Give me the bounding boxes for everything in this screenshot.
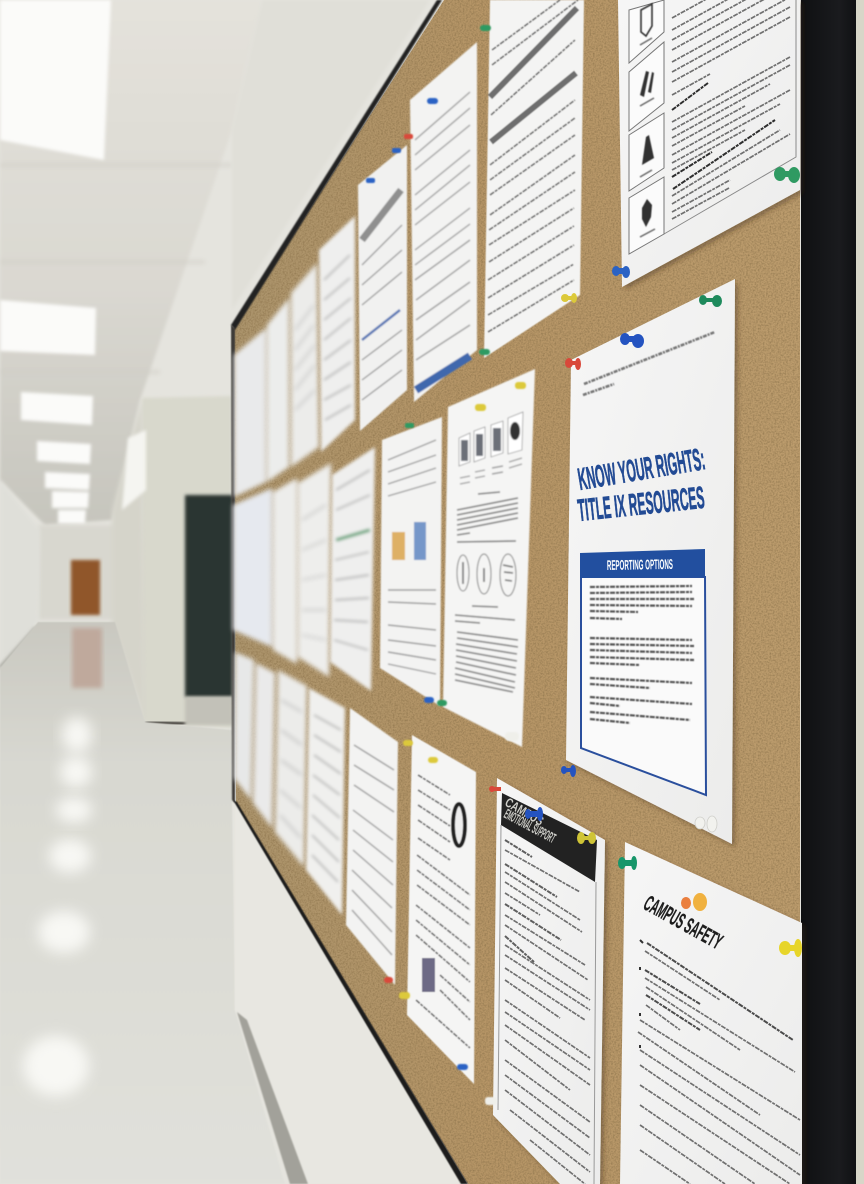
board frame: right: [801, 0, 856, 1184]
floor: [0, 622, 285, 1184]
far pins: [366, 25, 526, 1105]
far papers: top row: [234, 263, 319, 497]
inner frame: [664, 0, 796, 234]
board frame: bottom: [233, 800, 468, 1184]
paper: emotional support: [493, 778, 605, 1184]
floor reflections: [23, 717, 92, 1096]
board frame: left: [231, 325, 235, 803]
paper: middle row 3: [380, 417, 442, 706]
paper: emotional support: EMOTIONAL SUPPORT: [502, 806, 559, 846]
cork board: [230, 0, 864, 1184]
side wall with door: [142, 396, 232, 728]
paper: bottom row 4: [346, 708, 398, 985]
far papers: middle row: [233, 463, 331, 677]
reporting options body text: [590, 586, 694, 723]
mid papers group: [306, 216, 375, 915]
poster heading: [575, 441, 707, 528]
ring emblem: [453, 804, 465, 846]
lower wall beneath board: [235, 805, 465, 1184]
brown door at far end: [71, 560, 100, 615]
dark door: [185, 495, 233, 697]
sheet body text: [672, 0, 790, 219]
paper: top row 2: [484, 0, 584, 358]
paper: top row 4: [358, 145, 407, 431]
baseboard: [237, 1012, 308, 1184]
circle glyphs: [463, 562, 513, 584]
ceiling lights: [0, 0, 111, 524]
paper: middle row 2: [443, 369, 535, 747]
body text: [505, 840, 561, 962]
portraits: [461, 422, 520, 461]
right far wall section: [112, 400, 145, 722]
paper: campus safety: [620, 842, 802, 1184]
upper wall above board: [232, 0, 430, 310]
wall right of frame: [856, 0, 864, 1184]
left corridor wall: [0, 480, 40, 665]
icon glyphs: [640, 4, 655, 237]
reporting options box: [581, 577, 706, 795]
paper: top row 3: [410, 42, 477, 402]
paper: campus safety: CAMPUS SAFETY: [640, 891, 727, 954]
bullet marks: [640, 940, 643, 1048]
main poster: Title IX resources: REPORTING OPTIONS: [607, 556, 673, 573]
reflection of far door: [72, 628, 102, 688]
poster intro text: [583, 332, 715, 395]
white strip on far wall: [122, 430, 146, 510]
space under door: [185, 697, 233, 725]
portrait tiles: [459, 412, 523, 466]
chart images: [392, 532, 405, 560]
board frame: top: [231, 0, 442, 330]
header text: CAMPUS: [502, 795, 547, 829]
black header band: [501, 793, 597, 882]
paper: bottom row 3: [407, 735, 476, 1084]
near pins: [489, 167, 802, 957]
campus safety body text: [645, 943, 793, 1040]
paper: icon sheet top right: [618, 0, 800, 287]
paper: top row 5: [319, 216, 355, 452]
push pins: [366, 25, 802, 1105]
paper: bottom row 5: [306, 688, 345, 915]
icon circles: [457, 554, 516, 596]
thumbnail image: [422, 958, 435, 992]
reporting options header: [580, 549, 705, 578]
icon tiles: [629, 0, 664, 254]
main poster: Title IX resources: [566, 279, 735, 844]
far papers: bottom row: [234, 652, 307, 867]
left wall base shadow: [0, 628, 36, 668]
dark baseboard: [145, 722, 185, 724]
corridor end wall: [38, 525, 116, 620]
ceiling tile lines: [0, 165, 232, 372]
cork texture: [235, 0, 800, 1184]
paper: middle row 4: [330, 447, 375, 691]
ceiling: [0, 0, 262, 525]
blue bar: [416, 356, 470, 390]
